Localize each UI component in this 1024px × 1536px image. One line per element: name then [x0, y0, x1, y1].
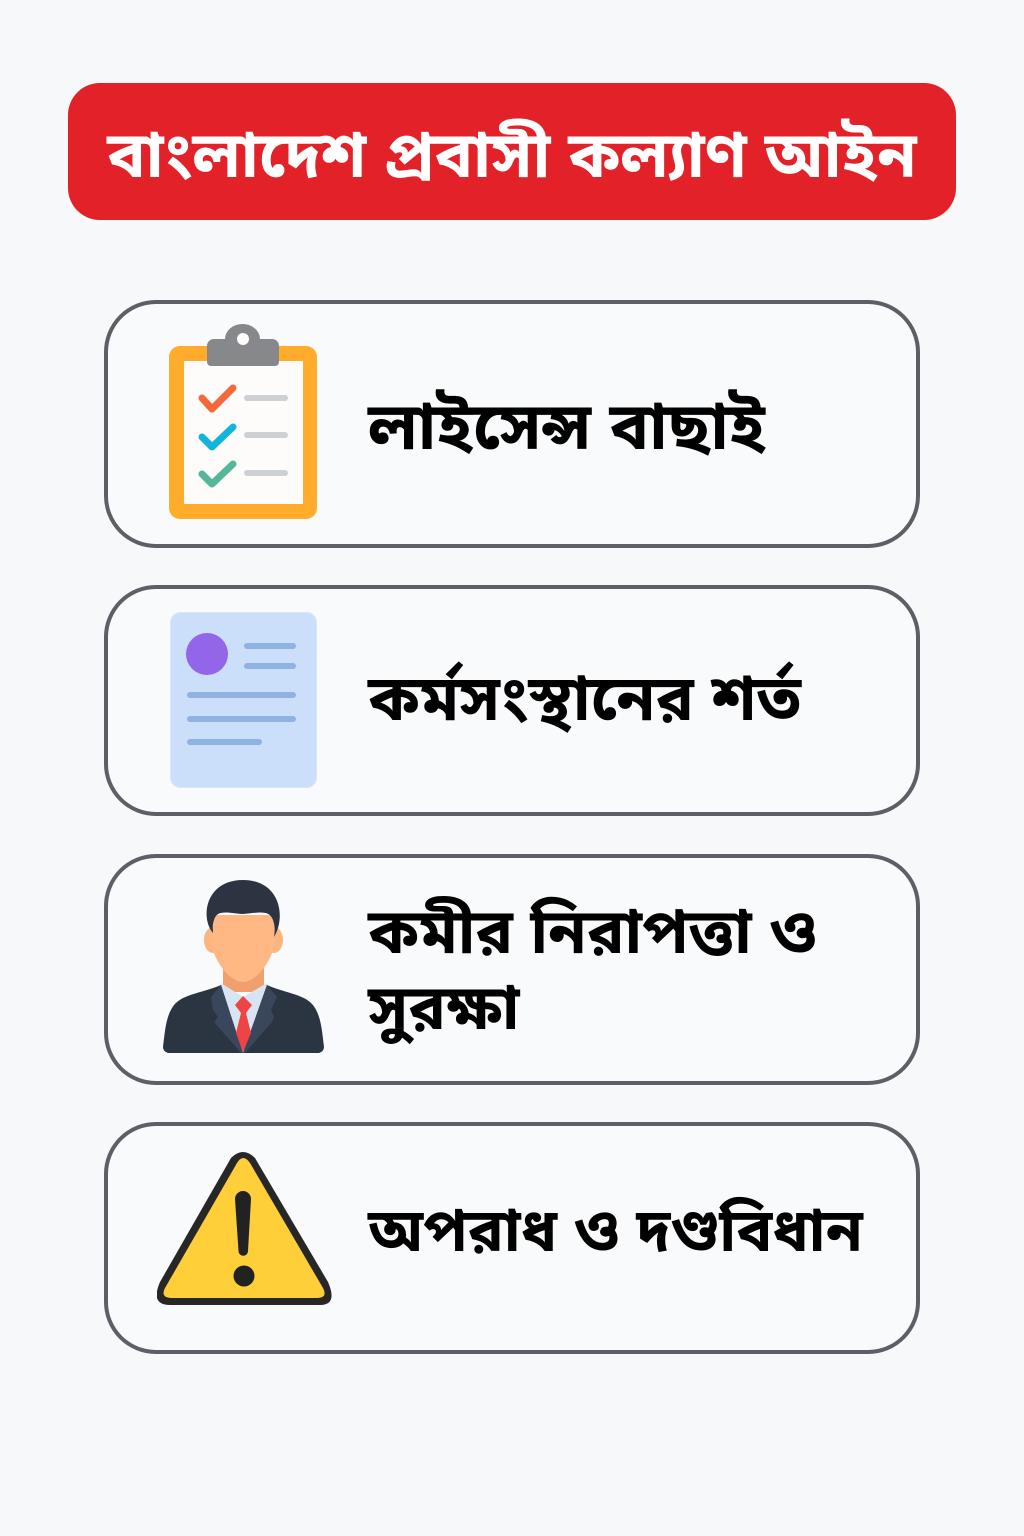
panel: offences and penalties — [104, 1122, 920, 1354]
panel: worker safety — [104, 854, 920, 1085]
icon: businessman — [163, 880, 324, 1053]
label: worker safety: সুরক্ষা — [368, 973, 520, 1043]
label: worker safety: কমীর নিরাপত্তা ও — [368, 897, 817, 967]
title — [68, 83, 956, 220]
icon: document profile — [170, 612, 317, 788]
label: offences and penalties: অপরাধ ও দণ্ডবিধান — [368, 1197, 863, 1264]
icon: warning triangle — [157, 1152, 332, 1305]
title: বাংলাদেশ প্রবাসী কল্যাণ আইন — [107, 119, 917, 191]
label: license selection: লাইসেন্স বাছাই — [368, 389, 765, 463]
panel: license selection — [104, 300, 920, 548]
icon: clipboard checklist — [169, 324, 317, 519]
panel: employment conditions — [104, 585, 920, 816]
label: employment conditions: কর্মসংস্থানের শর্ত — [368, 664, 801, 734]
label: worker safety — [367, 896, 817, 1044]
